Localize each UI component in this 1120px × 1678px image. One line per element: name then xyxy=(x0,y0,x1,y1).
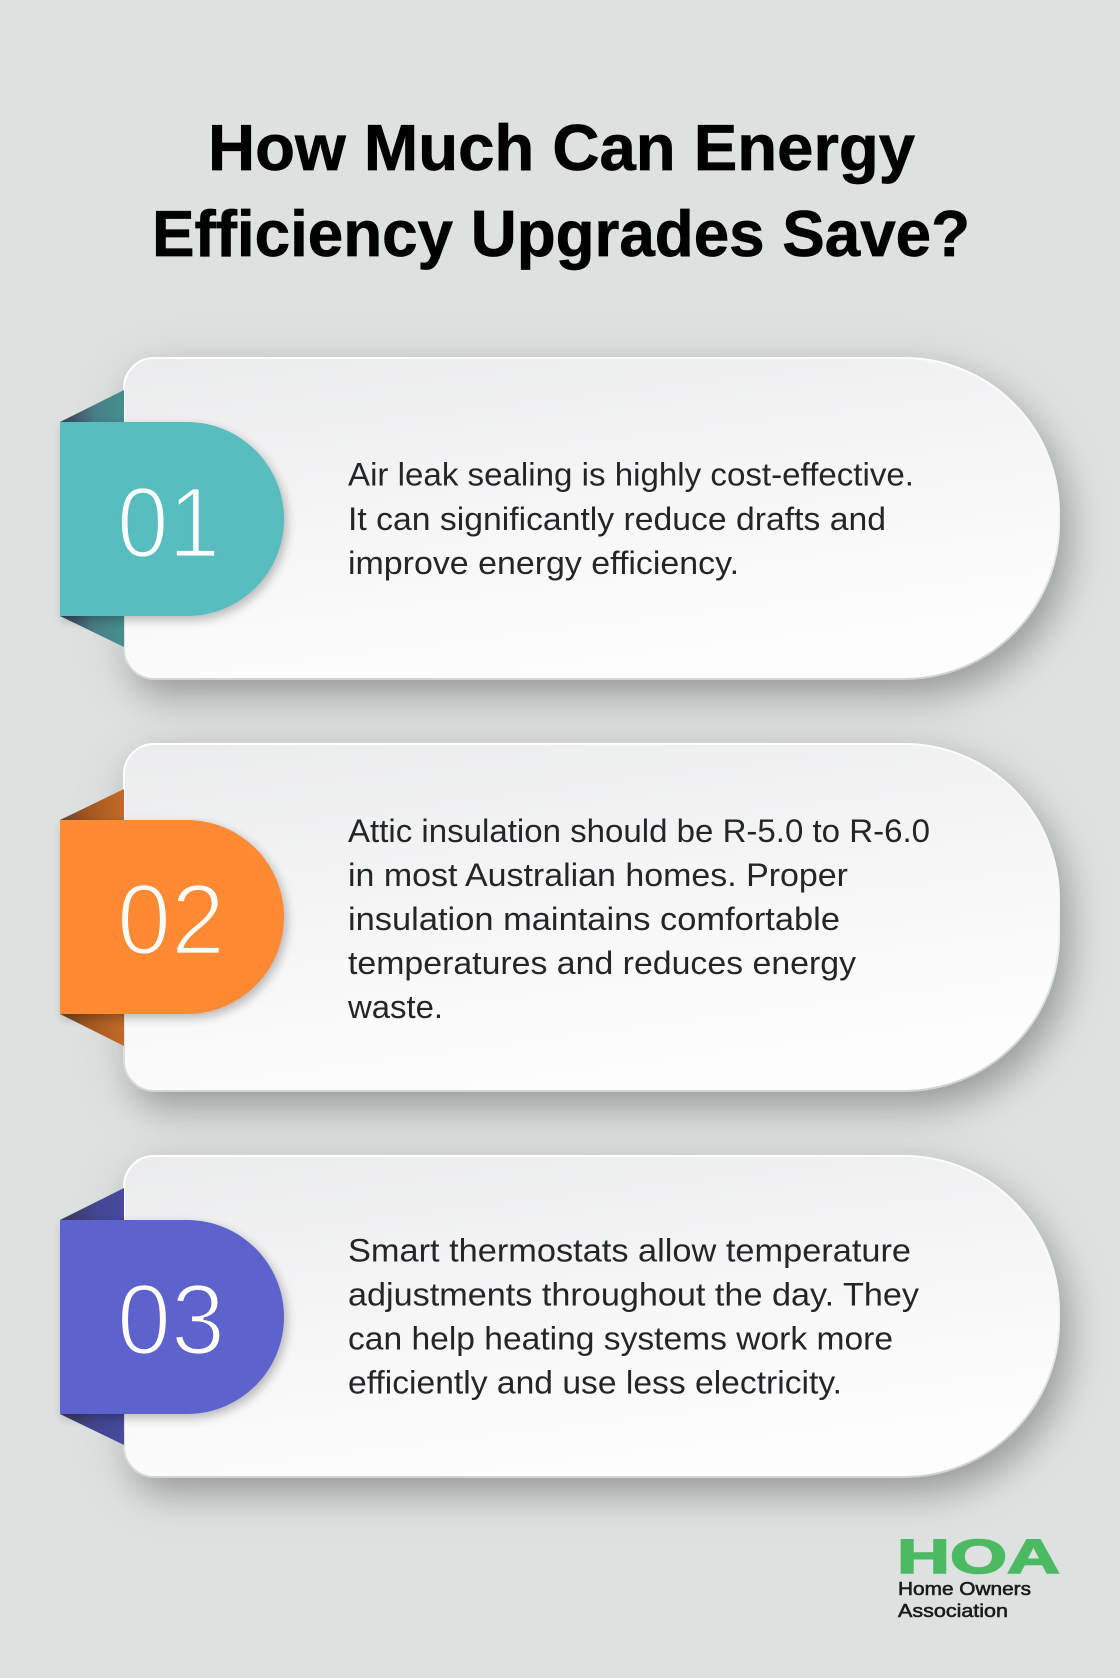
text block: step 03: can help heating systems work more xyxy=(348,1320,893,1356)
text block: step 02 xyxy=(347,813,930,1025)
text block: step 03: Smart thermostats allow temperature xyxy=(348,1232,911,1268)
logo: HOA Home Owners Association: HOA xyxy=(897,1530,1060,1584)
logo: HOA Home Owners Association: Association xyxy=(898,1601,1008,1621)
panel: step 02 attic insulation xyxy=(60,744,1069,1107)
text block: step 01 xyxy=(348,456,914,581)
number tab: 03: 03 xyxy=(117,1264,225,1376)
panel: step 01 air leak sealing xyxy=(60,358,1069,695)
ribbon fold: step 03 xyxy=(60,1188,124,1445)
panel: step 03 smart thermostats xyxy=(60,1156,1069,1493)
text block: step 02: Attic insulation should be R-5.0 to R-6.0 xyxy=(348,813,930,849)
text block: step 02: in most Australian homes. Proper xyxy=(348,857,848,893)
number tab: 03 xyxy=(60,1220,287,1418)
logo: HOA Home Owners Association: Home Owners xyxy=(898,1579,1031,1599)
number tab: 01: 01 xyxy=(117,467,220,579)
text block: step 02: waste. xyxy=(347,989,443,1025)
number tab: 02: 02 xyxy=(117,864,225,976)
title: How Much Can Energy xyxy=(208,111,915,184)
ribbon fold: step 02 xyxy=(60,789,124,1046)
title xyxy=(152,111,970,270)
text block: step 03: efficiently and use less electricity. xyxy=(348,1364,842,1400)
text block: step 03: adjustments throughout the day. They xyxy=(348,1276,920,1312)
text block: step 01: Air leak sealing is highly cost-effective. xyxy=(348,456,914,492)
title: Efficiency Upgrades Save? xyxy=(152,197,970,270)
logo: HOA Home Owners Association xyxy=(897,1530,1060,1621)
number tab: 02 xyxy=(60,820,287,1018)
text block: step 02: temperatures and reduces energy xyxy=(348,945,857,981)
text block: step 01: It can significantly reduce drafts and xyxy=(348,501,886,537)
ribbon fold: step 01 xyxy=(60,390,124,647)
text block: step 01: improve energy efficiency. xyxy=(348,545,739,581)
number tab: 01 xyxy=(60,422,287,620)
text block: step 02: insulation maintains comfortable xyxy=(348,901,840,937)
text block: step 03 xyxy=(348,1232,920,1400)
